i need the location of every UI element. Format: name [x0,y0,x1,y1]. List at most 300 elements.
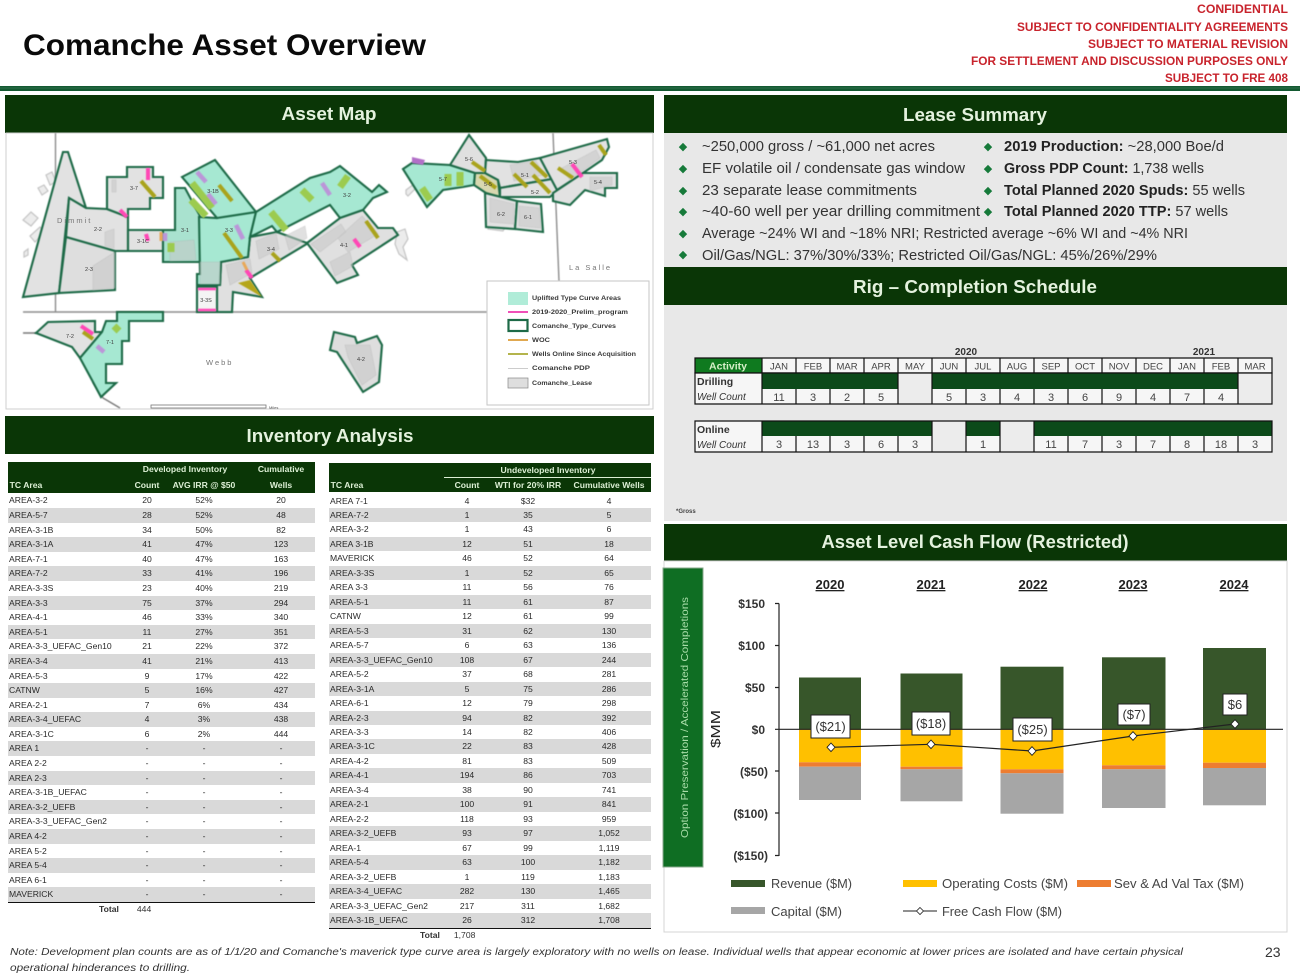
developed inventory rows: - [203,787,205,797]
developed inventory rows: - [203,802,205,812]
undeveloped inventory rows: 99 [604,611,614,621]
chart legend: Capital ($M) [771,905,842,919]
undeveloped inventory rows: 11 [463,597,471,607]
developed inventory rows: AREA-3-4_UEFAC [9,714,81,724]
undeveloped inventory rows: 1,465 [598,886,620,896]
data label ($7) [1118,704,1150,725]
undeveloped inventory rows: AREA-4-2 [330,756,369,766]
undeveloped inventory rows: 509 [602,756,616,766]
area 3-3 [197,204,256,285]
undeveloped inventory rows: AREA-5-3 [330,626,369,636]
undeveloped inventory rows: 392 [602,713,616,723]
undeveloped inventory rows: 136 [602,640,616,650]
map legend: 2019-2020_Prelim_program [532,309,628,316]
undeveloped inventory rows: 76 [604,582,614,592]
developed inventory rows: - [203,773,205,783]
developed inventory rows: - [203,846,205,856]
bullet diamonds: ◆ [679,206,688,218]
undeveloped inventory rows: 6 [607,524,611,534]
developed inventory rows: 21 [142,641,152,651]
undeveloped inventory rows: 37 [462,669,472,679]
undeveloped inventory rows: 82 [523,727,533,737]
undeveloped inventory rows: 1 [465,510,469,520]
y axis labels [733,597,768,863]
undeveloped inventory rows: 87 [604,597,614,607]
developed inventory rows: 40% [195,583,213,593]
undeveloped inventory rows: 12 [462,539,472,549]
developed inventory rows: AREA-3-3_UEFAC_Gen2 [9,816,107,826]
developed inventory rows: AREA 5-2 [9,846,47,856]
developed inventory rows: 52% [195,495,213,505]
undeveloped inventory rows: AREA-3-1B_UEFAC [330,915,408,925]
data label ($25): ($25) [1017,722,1048,737]
lease detail shading [93,150,612,385]
developed inventory rows: 196 [274,568,288,578]
schedule header row: JAN [1178,362,1196,372]
area 3-1B [182,160,256,218]
undeveloped inventory rows: 52 [523,568,533,578]
schedule header row: SEP [1041,362,1061,372]
developed inventory rows: 427 [274,685,288,695]
map area labels: 3-4 [267,247,275,253]
undeveloped inventory rows: 83 [523,741,533,751]
data label $6: $6 [1228,697,1242,712]
drilling row: 4 [1150,392,1156,404]
developed inventory rows: - [280,758,282,768]
undeveloped inventory rows: 1 [465,524,469,534]
undeveloped inventory rows: 64 [604,553,614,563]
undeveloped inventory rows: 62 [523,626,533,636]
year labels: 2020 [955,347,978,358]
map area labels: 2-2 [94,227,102,233]
county names [57,216,612,367]
developed inventory rows: 41 [142,656,152,666]
schedule header row: Activity [709,360,747,372]
undeveloped inventory rows: AREA-4-1 [330,770,369,780]
developed inventory rows: 219 [274,583,288,593]
area 5-6 [450,135,486,173]
map legend: Comanche_Type_Curves [532,323,616,330]
footnote [10,947,1184,974]
schedule header row [695,358,1272,373]
undeveloped inventory rows: 67 [462,843,472,853]
undeveloped inventory table header: Undeveloped Inventory [500,465,596,475]
online row: 13 [807,439,819,451]
developed inventory rows: 351 [274,627,288,637]
schedule header row: MAR [836,362,858,372]
undeveloped inventory rows: 1,708 [598,915,620,925]
data label ($25) [1013,718,1052,741]
undeveloped inventory rows: 56 [523,582,533,592]
developed inventory rows: AREA-3-3_UEFAC_Gen10 [9,641,112,651]
developed inventory rows: - [280,816,282,826]
bullet diamonds: ◆ [984,163,993,175]
page number: 23 [1265,944,1281,960]
map area labels: 6-1 [524,215,532,221]
undeveloped inventory rows: AREA-2-3 [330,713,369,723]
map legend: WOC [532,337,550,344]
developed inventory rows: MAVERICK [9,889,53,899]
schedule header row: OCT [1075,362,1095,372]
developed inventory rows: 6% [198,700,210,710]
drilling row [695,373,1272,404]
undeveloped inventory rows: CATNW [330,611,361,621]
online row [695,421,1272,452]
map area labels: 3-1C [137,239,149,245]
undeveloped inventory rows: AREA-3-3 [330,727,369,737]
developed inventory rows: AREA-3-2_UEFB [9,802,75,812]
developed inventory rows: - [203,889,205,899]
map legend [487,281,649,405]
heading: rig completion schedule: Rig – Completion Schedule [853,276,1097,297]
schedule header row: NOV [1109,362,1130,372]
bullet diamonds: ◆ [679,249,688,261]
developed inventory rows: - [203,816,205,826]
online row: 3 [844,439,850,451]
undeveloped inventory table header: Cumulative Wells [574,480,644,490]
developed inventory rows: 11 [143,627,151,637]
y axis labels: ($150) [733,849,768,863]
developed inventory rows: - [280,773,282,783]
undeveloped inventory rows: 703 [602,770,616,780]
developed inventory rows: - [280,743,282,753]
area 3-4 [217,230,330,312]
drilling row: Drilling [697,376,733,388]
undeveloped inventory rows: 63 [523,640,533,650]
map area labels: 5-2 [531,190,539,196]
undeveloped inventory rows: AREA-3-2_UEFB [330,828,396,838]
developed inventory table header: Count [135,480,159,490]
online row: 3 [776,439,782,451]
map scale bar: Miles [269,405,278,410]
undeveloped inventory rows: 4 [465,496,469,506]
developed inventory rows: - [146,743,148,753]
developed inventory rows: 37% [195,598,213,608]
developed inventory table header: AVG IRR @ $50 [173,480,235,490]
undeveloped inventory rows: 298 [602,698,616,708]
drilling row: 7 [1184,392,1190,404]
undeveloped inventory rows: AREA-3-2 [330,524,369,534]
area 5-2 [500,179,560,197]
developed inventory rows: - [146,889,148,899]
undeveloped inventory rows: 1,182 [598,857,620,867]
schedule header row: DEC [1143,362,1163,372]
developed inventory rows: AREA-3-3 [9,598,48,608]
developed inventory rows: 41 [142,539,152,549]
lease facts: 23 separate lease commitments [702,183,917,199]
area 5-1 [485,158,557,188]
bullet diamonds: ◆ [984,185,993,197]
developed inventory rows: - [280,875,282,885]
developed inventory rows: 123 [274,539,288,549]
map area labels: 4-1 [340,243,348,249]
undeveloped inventory rows: 1 [465,568,469,578]
undeveloped inventory rows: 282 [460,886,474,896]
map area labels [66,157,602,363]
y axis title: $MM [708,710,723,748]
developed inventory rows: 6 [145,729,149,739]
developed inventory rows: 41% [195,568,213,578]
year labels [955,347,1216,358]
developed inventory rows: 294 [274,598,288,608]
data label ($21): ($21) [815,719,846,734]
bullet diamonds: ◆ [984,206,993,218]
schedule header row: JUN [940,362,958,372]
drilling row: 4 [1014,392,1020,404]
undeveloped inventory rows: 5 [465,684,469,694]
developed inventory rows: AREA 5-4 [9,860,47,870]
lease facts: 2019 Production: ~28,000 Boe/d [1004,139,1224,155]
confidentiality notice: SUBJECT TO CONFIDENTIALITY AGREEMENTS [1017,20,1288,34]
area 7-1 [80,312,163,397]
developed inventory rows: - [146,773,148,783]
undeveloped inventory rows: 1,052 [598,828,620,838]
undeveloped inventory rows: 312 [521,915,535,925]
undeveloped inventory table header [329,463,651,492]
schedule header row: JAN [770,362,788,372]
developed inventory rows: 340 [274,612,288,622]
developed inventory rows: 22% [195,641,213,651]
bullet diamonds: ◆ [984,141,993,153]
undeveloped inventory table header: TC Area [331,480,363,490]
well program stripes [81,145,606,352]
developed inventory rows: 422 [274,671,288,681]
developed inventory rows: 47% [195,539,213,549]
confidentiality notice: FOR SETTLEMENT AND DISCUSSION PURPOSES ONLY [971,54,1288,68]
undeveloped inventory rows: 82 [523,713,533,723]
undeveloped inventory rows: 38 [462,785,472,795]
online row: 6 [878,439,884,451]
area 2-2 [66,198,128,251]
online row: 7 [1150,439,1156,451]
developed inventory rows: 33% [195,612,213,622]
undeveloped inventory rows: 12 [462,611,472,621]
area 6-1 [515,201,543,232]
developed inventory rows: AREA 4-2 [9,831,47,841]
developed inventory rows: 5 [145,685,149,695]
drilling row: 5 [946,392,952,404]
developed inventory table header: Wells [270,480,292,490]
online row: 7 [1082,439,1088,451]
undeveloped inventory rows: 108 [460,655,474,665]
map legend: Uplifted Type Curve Areas [532,295,621,302]
developed inventory rows: 75 [142,598,152,608]
developed inventory rows: 82 [276,525,286,535]
schedule header row: JUL [975,362,991,372]
developed inventory rows: AREA-3-2 [9,495,48,505]
stacked bar chart [708,597,1283,863]
developed inventory rows: - [280,860,282,870]
developed inventory rows: - [203,831,205,841]
map scale bar [151,405,278,410]
year headings: 2020 [816,577,844,592]
undeveloped inventory rows: AREA-6-1 [330,698,369,708]
drilling row: 11 [773,392,785,404]
drilling row: 9 [1116,392,1122,404]
area 5-4 [553,173,617,205]
lease facts: Average ~24% WI and ~18% NRI; Restricted average ~6% WI and ~4% NRI [702,226,1188,242]
online row: 8 [1184,439,1190,451]
developed inventory rows: AREA-3-3S [9,583,53,593]
undeveloped inventory rows: 4 [607,496,611,506]
undeveloped inventory rows: AREA 7-1 [330,496,368,506]
undeveloped inventory rows: AREA-5-4 [330,857,369,867]
schedule header row: APR [871,362,891,372]
developed inventory rows: 7 [145,700,149,710]
developed inventory rows: AREA-5-1 [9,627,48,637]
map area labels: 4-2 [357,357,365,363]
developed inventory rows: AREA-5-7 [9,510,48,520]
county names: Webb [206,358,233,367]
undeveloped inventory rows: 841 [602,799,616,809]
undeveloped inventory rows: 93 [462,828,472,838]
developed inventory rows: - [203,860,205,870]
title: Comanche Asset Overview [23,29,427,62]
developed inventory rows: AREA 2-3 [9,773,47,783]
heading: inventory analysis [5,416,654,454]
lease facts [702,139,1245,264]
developed inventory rows: AREA-4-1 [9,612,48,622]
side label: Option Preservation / Accelerated Completions [679,597,691,838]
y axis labels: $50 [745,681,765,695]
drilling row: 5 [878,392,884,404]
developed inventory rows: 4 [145,714,149,724]
developed inventory rows: 40 [142,554,152,564]
undeveloped inventory rows: AREA-5-2 [330,669,369,679]
map area labels: 5-4 [594,180,602,186]
county names: Dimmit [57,216,92,225]
confidentiality notice: SUBJECT TO MATERIAL REVISION [1088,37,1288,51]
developed inventory total: Total 444 [99,904,151,914]
drilling row: 3 [980,392,986,404]
developed inventory table header: TC Area [10,480,42,490]
undeveloped inventory rows: AREA-2-1 [330,799,369,809]
developed inventory table header [8,462,315,493]
undeveloped inventory rows: 90 [523,785,533,795]
developed inventory rows: 21% [195,656,213,666]
map area labels: 3-3S [200,298,212,304]
developed inventory rows: - [280,787,282,797]
undeveloped inventory rows: AREA-3-2_UEFB [330,872,396,882]
undeveloped inventory rows: 100 [521,857,535,867]
developed inventory rows: 27% [195,627,213,637]
undeveloped inventory rows: 61 [523,611,533,621]
area 3-1C [128,230,163,251]
year headings: 2021 [917,577,945,592]
undeveloped inventory rows: AREA-5-7 [330,640,369,650]
year headings: 2023 [1119,577,1147,592]
undeveloped inventory rows: 12 [462,698,472,708]
bullet diamonds [679,141,993,261]
undeveloped inventory rows: AREA 3-3 [330,582,368,592]
undeveloped inventory rows: 1,119 [599,843,619,853]
y axis labels: ($100) [733,807,768,821]
operating cost bars [799,729,1266,769]
year headings: 2022 [1019,577,1047,592]
lease facts: Gross PDP Count: 1,738 wells [1004,161,1204,177]
heading: inventory analysis: Inventory Analysis [246,425,414,446]
undeveloped inventory rows: 959 [602,814,616,824]
undeveloped inventory rows: 26 [462,915,472,925]
heading: asset map [5,95,654,133]
undeveloped inventory rows: AREA-7-2 [330,510,369,520]
developed inventory rows: - [146,787,148,797]
developed inventory rows: - [203,743,205,753]
undeveloped inventory rows: 406 [602,727,616,737]
area 3-1 [163,188,200,262]
undeveloped inventory rows: 118 [460,814,474,824]
map area labels: 3-2 [343,193,351,199]
undeveloped inventory rows: 217 [460,901,474,911]
developed inventory rows: 413 [274,656,288,666]
undeveloped inventory rows: 14 [462,727,472,737]
developed inventory rows: 46 [142,612,152,622]
schedule header row: AUG [1007,362,1027,372]
confidentiality notice: CONFIDENTIAL [1197,2,1288,16]
undeveloped inventory rows: AREA-3-1C [330,741,375,751]
lease type curve polygons [23,135,617,397]
developed inventory rows: AREA-3-4 [9,656,48,666]
undeveloped inventory rows: 81 [462,756,472,766]
developed inventory rows: 9 [145,671,149,681]
schedule header row: FEB [1212,362,1230,372]
undeveloped inventory rows: 97 [523,828,533,838]
developed inventory rows: AREA-7-2 [9,568,48,578]
developed inventory rows: - [146,802,148,812]
map legend: Comanche_Lease [532,380,592,387]
area 6-2 [485,193,517,229]
map area labels: 7-1 [106,340,114,346]
lease facts: ~250,000 gross / ~61,000 net acres [702,139,935,155]
drilling row: 4 [1218,392,1224,404]
undeveloped inventory rows: AREA-3-4_UEFAC [330,886,402,896]
map area labels: 5-1 [521,173,529,179]
undeveloped inventory rows: 99 [523,843,533,853]
undeveloped inventory rows: 1,682 [598,901,620,911]
bullet diamonds: ◆ [679,228,688,240]
area 4-2 [330,332,382,392]
area 7-2 [36,321,102,358]
developed inventory rows: - [280,846,282,856]
developed inventory rows: 16% [195,685,213,695]
area 5-7 [403,163,475,207]
undeveloped inventory rows: AREA-3-1A [330,684,374,694]
map area labels: 6-2 [497,212,505,218]
year headings: 2024 [1220,577,1249,592]
lease facts: EF volatile oil / condensate gas window [702,161,966,177]
data label ($7): ($7) [1122,707,1146,722]
developed inventory rows: AREA-7-1 [9,554,48,564]
developed inventory rows: - [146,875,148,885]
online row: 11 [1045,439,1057,451]
panel: asset level cash flow [663,524,1287,932]
chart legend: Revenue ($M) [771,877,852,891]
map area labels: 2-3 [85,267,93,273]
undeveloped inventory rows: AREA-3-4 [330,785,369,795]
heading: asset level cash flow [664,524,1287,561]
developed inventory rows: - [280,831,282,841]
data label ($18): ($18) [916,716,946,731]
y axis labels: $150 [738,597,765,611]
undeveloped inventory rows: AREA-2-2 [330,814,369,824]
developed inventory rows: CATNW [9,685,40,695]
revenue bars [799,648,1266,729]
undeveloped inventory rows: 100 [460,799,474,809]
undeveloped inventory rows: 22 [462,741,472,751]
developed inventory rows: 23 [142,583,152,593]
undeveloped inventory rows: 67 [523,655,533,665]
undeveloped inventory rows: AREA-3-3_UEFAC_Gen10 [330,655,433,665]
